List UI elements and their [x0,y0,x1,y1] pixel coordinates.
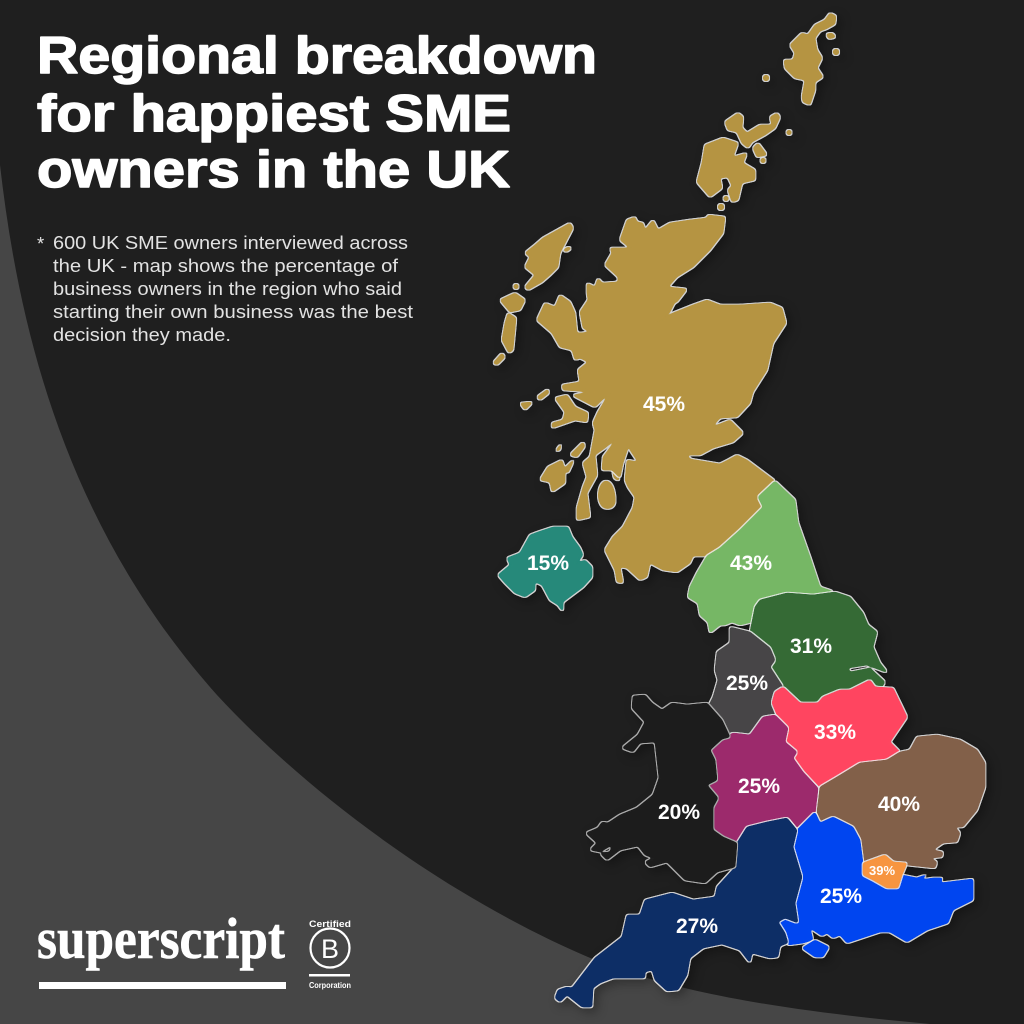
region: Wales 20%: 20% [658,801,700,824]
region: South West 27%: 27% [676,915,718,938]
Orkney [697,113,780,202]
region: East Midlands 33% [772,680,907,787]
Outer Hebrides [493,223,573,365]
region: South East 25%: 25% [820,885,862,908]
methodology note [37,232,413,345]
region: Northern Ireland 15%: 15% [527,552,569,575]
mainland Scotland [537,215,786,583]
logo: superscript wordmark: superscript [37,906,286,971]
title [37,27,597,199]
Arran and Bute [598,468,619,509]
region: Yorkshire 31%: 31% [790,635,832,658]
region: North West 25%: 25% [726,672,768,695]
region: Wales 20% [586,695,737,883]
logo: Certified B Corporation [309,919,351,990]
logo: Certified B Corporation: Corporation [309,980,351,990]
northern islets [514,33,839,289]
methodology note: 600 UK SME owners interviewed across [53,232,408,253]
region: Scotland 45% [493,13,839,583]
methodology note: starting their own business was the best [53,301,413,322]
title: Regional breakdown [37,27,597,85]
region: East of England 40%: 40% [878,793,920,816]
Isle of Wight [802,940,829,957]
background: grey corner sweep [0,165,930,1024]
methodology note: decision they made. [53,324,231,345]
logo: Certified B Corporation: B [321,934,339,964]
label: Scotland: 45% [643,393,685,416]
region: East Midlands 33%: 33% [814,721,856,744]
methodology note: * [37,233,44,254]
region: North East 43% [688,481,835,633]
Shetland [784,13,836,105]
region: Northern Ireland 15% [498,527,592,612]
region: East of England 40% [817,735,985,868]
region: Yorkshire 31% [750,592,888,703]
logo: Certified B Corporation: Certified [309,919,351,930]
region: London 39% [863,855,907,888]
region: South West 27% [555,818,802,1007]
region: South East 25% [778,812,973,957]
region: North East 43%: 43% [730,552,772,575]
region: West Midlands 25% [707,715,818,842]
Inner Hebrides [520,389,588,492]
map of the UK [493,13,985,1007]
region: West Midlands 25%: 25% [738,775,780,798]
methodology note: business owners in the region who said [53,278,402,299]
methodology note: the UK - map shows the percentage of [53,255,399,276]
region: North West 25% [708,627,783,737]
title: owners in the UK [37,141,510,199]
region: London 39%: 39% [869,863,895,878]
title: for happiest SME [37,85,511,143]
